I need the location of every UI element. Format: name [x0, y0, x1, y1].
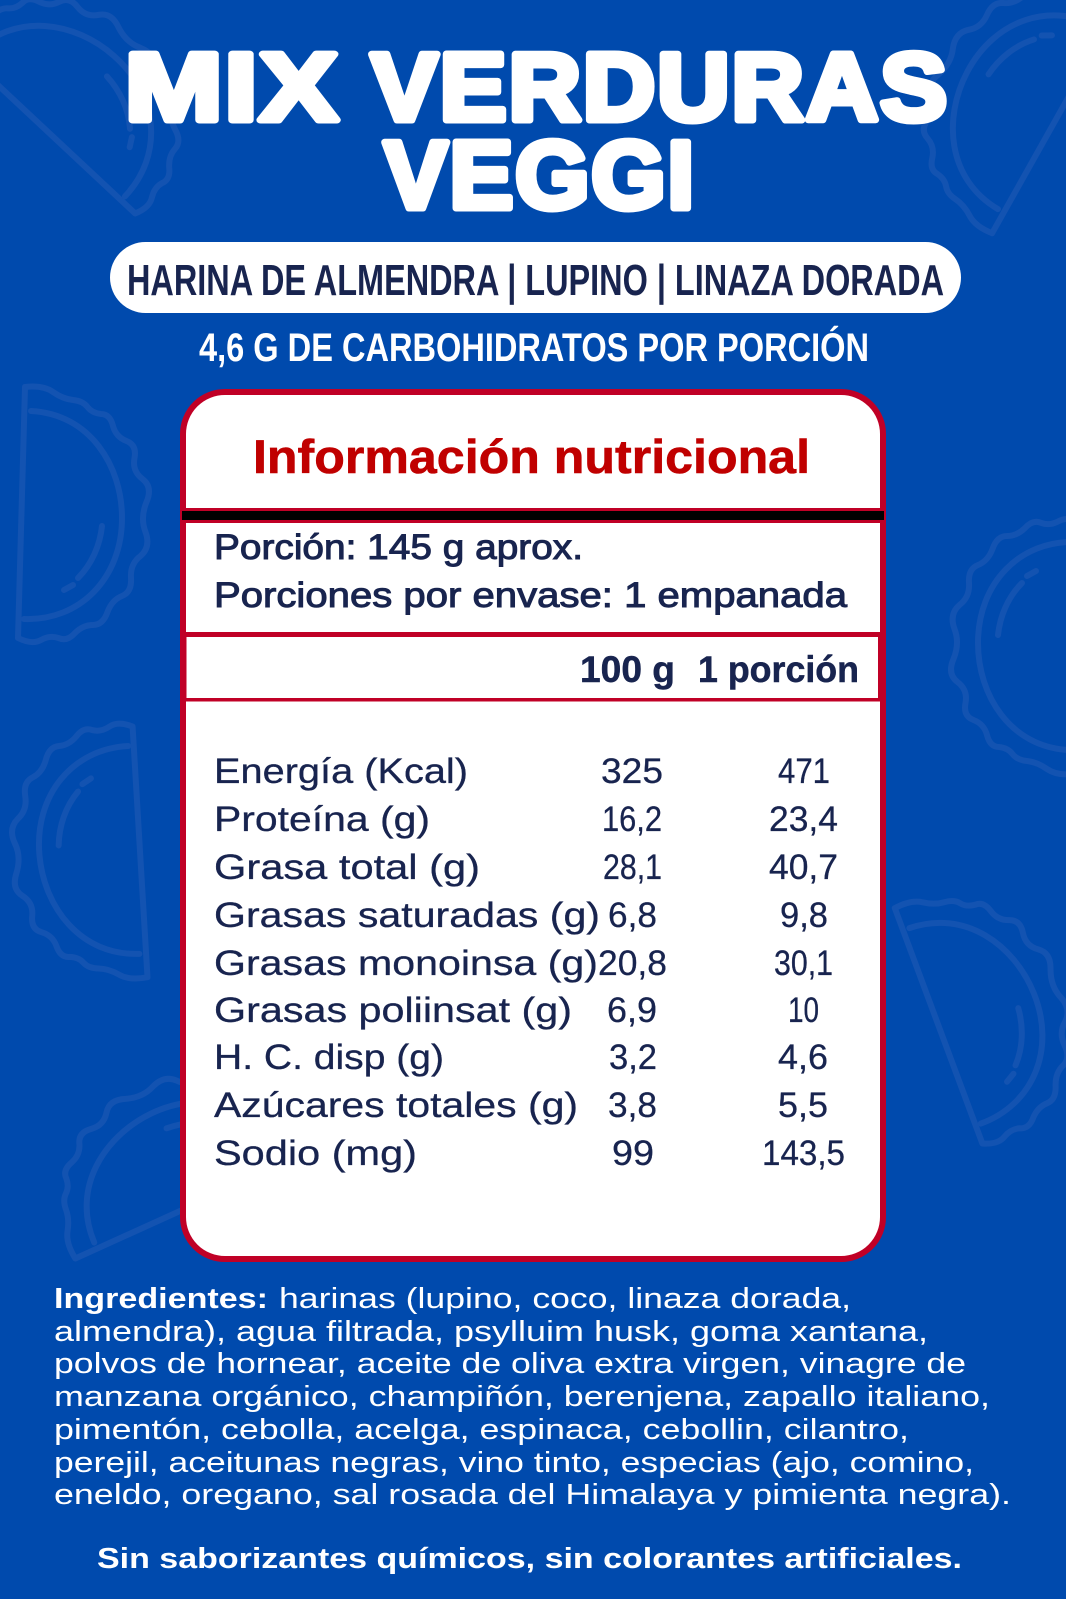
row: total fat — [214, 848, 838, 887]
row: total sugars — [214, 1086, 828, 1125]
row: polyunsaturated fat: 6,9 — [607, 991, 657, 1030]
footer note: Sin saborizantes químicos, sin colorantes artificiales. — [97, 1543, 962, 1575]
table header: 100 g — [580, 649, 675, 690]
row: energy — [214, 752, 830, 791]
title: MIX — [125, 34, 340, 141]
icon: empanada top left — [0, 0, 225, 216]
row: saturated fat: Grasas saturadas (g) — [214, 896, 600, 935]
serving information — [214, 528, 848, 615]
row: monounsaturated fat: Grasas monoinsa (g) — [214, 944, 598, 983]
row: energy: Energía (Kcal) — [214, 752, 468, 791]
pill: flours — [110, 242, 961, 313]
table header — [181, 632, 885, 702]
ingredients text block: pimentón, cebolla, acelga, espinaca, cebollin, cilantro, — [54, 1414, 909, 1446]
icon: empanada right lower — [888, 861, 1066, 1147]
row: protein: Proteína (g) — [214, 800, 430, 839]
row: polyunsaturated fat — [214, 991, 819, 1030]
row: sodium: 143,5 — [762, 1134, 845, 1173]
row: available carbohydrates — [214, 1038, 828, 1077]
row: sodium — [214, 1134, 845, 1173]
ingredients text block: almendra), agua filtrada, psylluim husk, goma xantana, — [54, 1316, 928, 1348]
serving information: Porción: 145 g aprox. — [214, 528, 583, 567]
table header: 1 porción — [698, 649, 859, 690]
icon: empanada right upper — [951, 519, 1066, 774]
serving information: Porciones por envase: 1 empanada — [214, 576, 848, 615]
carbohydrates subtitle: 4,6 G DE CARBOHIDRATOS POR PORCIÓN — [199, 324, 869, 370]
row: saturated fat: 9,8 — [780, 896, 828, 935]
row: total fat: Grasa total (g) — [214, 848, 480, 887]
ingredients text block: eneldo, oregano, sal rosada del Himalaya y pimienta negra). — [54, 1479, 1011, 1511]
title: VEGGI — [384, 122, 696, 229]
row: total sugars: 3,8 — [608, 1086, 657, 1125]
row: energy: 325 — [601, 752, 663, 791]
row: polyunsaturated fat: Grasas poliinsat (g) — [214, 991, 572, 1030]
row: protein: 16,2 — [602, 800, 662, 839]
row: saturated fat — [214, 896, 828, 935]
title — [125, 34, 949, 229]
row: sodium: Sodio (mg) — [214, 1134, 417, 1173]
row: monounsaturated fat — [214, 944, 833, 983]
ingredients text block: polvos de hornear, aceite de oliva extra virgen, vinagre de — [54, 1348, 966, 1380]
row: protein — [214, 800, 838, 839]
row: available carbohydrates: 4,6 — [778, 1038, 828, 1077]
panel: nutrition card — [180, 392, 886, 1259]
row: monounsaturated fat: 30,1 — [774, 944, 833, 983]
row: protein: 23,4 — [769, 800, 838, 839]
row: total fat: 40,7 — [769, 848, 838, 887]
icon: empanada left upper — [18, 387, 149, 642]
row: polyunsaturated fat: 10 — [788, 991, 819, 1030]
icon: empanada left lower — [21, 1035, 308, 1265]
ingredients text block: manzana orgánico, champiñón, berenjena, zapallo italiano, — [54, 1381, 990, 1413]
row: available carbohydrates: H. C. disp (g) — [214, 1038, 444, 1077]
ingredients text block: harinas (lupino, coco, linaza dorada, — [279, 1283, 851, 1315]
ingredients text block: Ingredientes: — [54, 1283, 268, 1315]
row: total sugars: 5,5 — [778, 1086, 828, 1125]
heading: nutrition information: Información nutricional — [253, 430, 810, 483]
row: saturated fat: 6,8 — [608, 896, 657, 935]
ingredients text block: perejil, aceitunas negras, vino tinto, especias (ajo, comino, — [54, 1447, 974, 1479]
row: total fat: 28,1 — [603, 848, 662, 887]
row: energy: 471 — [778, 752, 830, 791]
ingredients text block — [54, 1283, 1011, 1511]
divider band — [180, 508, 886, 523]
nutrition table — [214, 752, 845, 1173]
icon: empanada left middle — [2, 722, 154, 988]
row: available carbohydrates: 3,2 — [609, 1038, 657, 1077]
title: VERDURAS — [371, 34, 949, 141]
row: total sugars: Azúcares totales (g) — [214, 1086, 578, 1125]
icon: empanada top right — [882, 0, 1066, 237]
row: monounsaturated fat: 20,8 — [598, 944, 667, 983]
row: sodium: 99 — [612, 1134, 654, 1173]
